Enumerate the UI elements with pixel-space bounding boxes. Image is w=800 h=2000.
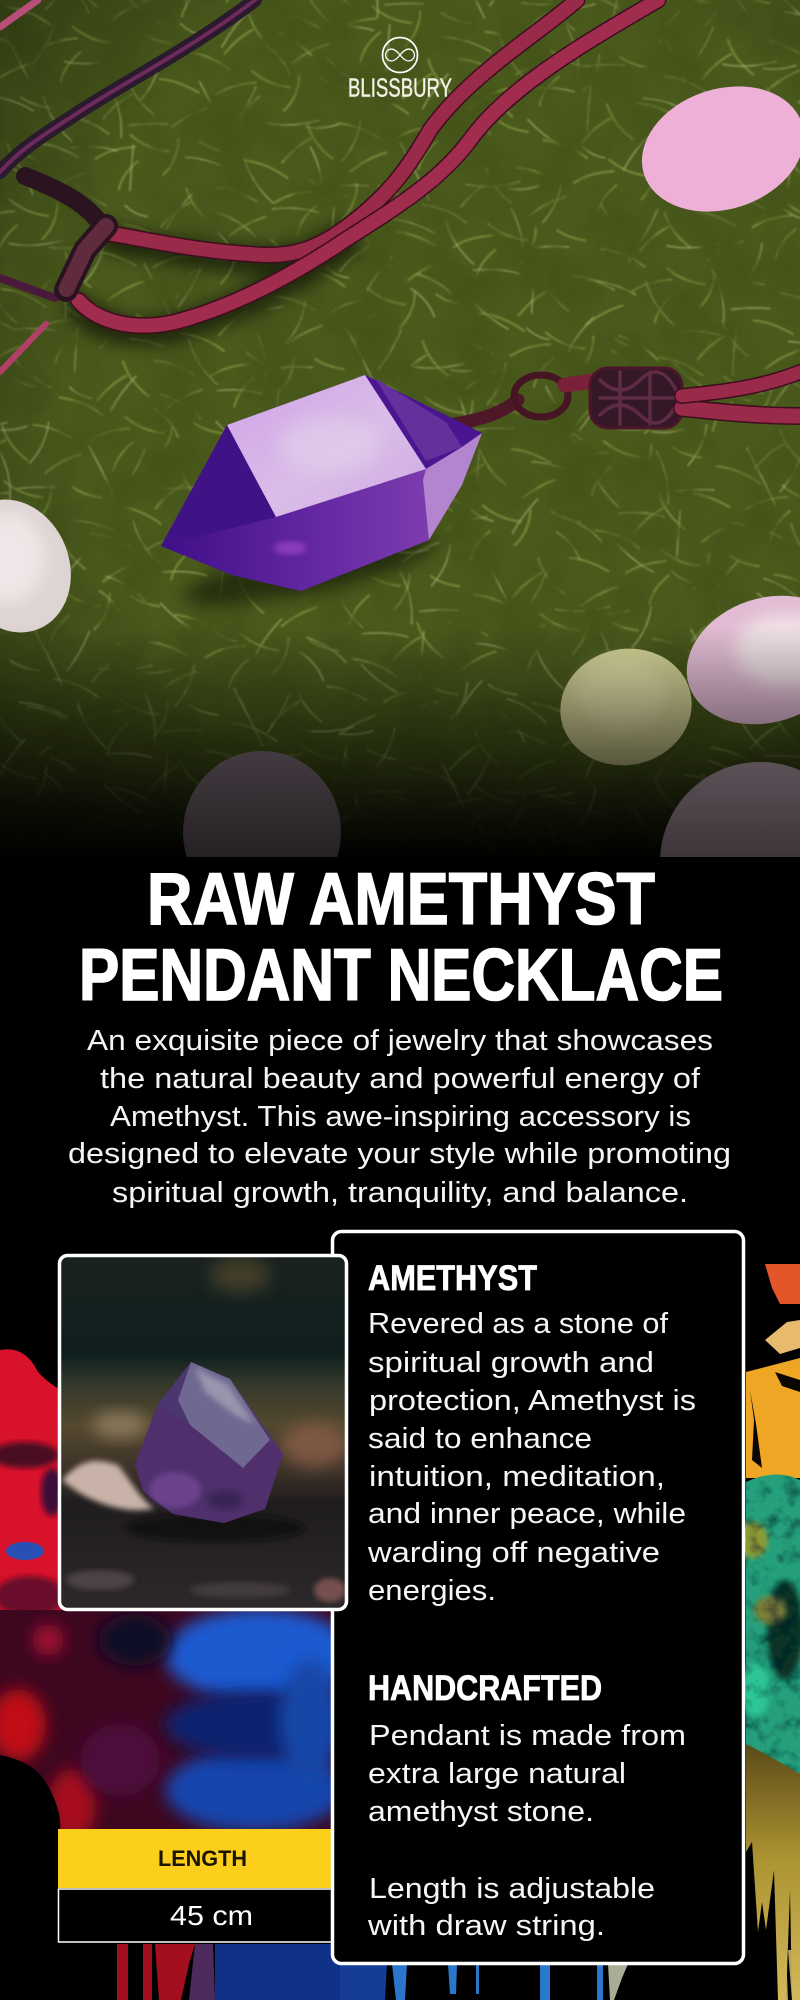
dark stone bottom	[183, 751, 341, 857]
white egg left	[0, 500, 71, 632]
paint splash: right orange, green and yellow	[736, 1264, 800, 2000]
intro paragraph	[68, 1025, 731, 1209]
length value	[58, 1889, 334, 1942]
necklace clasp and knot	[449, 368, 800, 428]
handcrafted description: extra large natural	[368, 1758, 626, 1790]
red powder beside photo	[0, 1349, 66, 1620]
pink-white egg right	[686, 596, 800, 724]
yellow drips	[746, 1744, 800, 2000]
amethyst pendant	[161, 375, 482, 619]
amethyst description: Revered as a stone of	[368, 1308, 668, 1340]
length header	[58, 1829, 333, 1888]
bottom fade	[0, 634, 800, 857]
brand logo	[348, 38, 452, 102]
panel: text card	[332, 1232, 744, 1964]
handcrafted description	[367, 1720, 686, 1942]
hero photo: amethyst pendant on grass	[0, 0, 800, 857]
amethyst description: energies.	[368, 1575, 496, 1607]
paint splash: bottom drips	[117, 1944, 797, 2000]
teal powder	[736, 1474, 800, 1774]
grey stone bottom right	[660, 762, 800, 857]
heading: handcrafted: HANDCRAFTED	[368, 1669, 602, 1708]
pink egg top right	[642, 86, 800, 212]
title: RAW AMETHYST	[147, 859, 655, 940]
grass background	[0, 0, 800, 857]
length value: 45 cm	[170, 1900, 253, 1931]
handcrafted description: amethyst stone.	[368, 1796, 594, 1828]
necklace cords	[0, 0, 658, 372]
intro paragraph: Amethyst. This awe-inspiring accessory is	[110, 1101, 691, 1133]
intro paragraph: designed to elevate your style while promoting	[68, 1138, 731, 1170]
orange powder	[746, 1264, 800, 1478]
lower powder field	[0, 1610, 331, 1829]
length header: LENGTH	[158, 1846, 247, 1871]
amethyst description: warding off negative	[367, 1537, 660, 1569]
handcrafted description: Length is adjustable	[369, 1873, 655, 1905]
brand name: BLISSBURY	[348, 72, 452, 102]
photo card: raw amethyst stone	[60, 1256, 349, 1610]
length table	[58, 1829, 334, 1942]
handcrafted description: Pendant is made from	[369, 1720, 686, 1752]
intro paragraph: An exquisite piece of jewelry that showcases	[87, 1025, 713, 1057]
intro paragraph: spiritual growth, tranquility, and balance.	[112, 1177, 688, 1209]
paint splash: left red and blue	[0, 1349, 355, 1841]
icon: infinity in circle	[382, 38, 418, 72]
handcrafted description: with draw string.	[367, 1910, 605, 1942]
amethyst description: spiritual growth and	[368, 1347, 654, 1379]
amethyst description: and inner peace, while	[368, 1498, 686, 1530]
amethyst description: said to enhance	[368, 1423, 592, 1455]
amethyst description: protection, Amethyst is	[369, 1385, 696, 1417]
title	[79, 859, 723, 1016]
intro paragraph: the natural beauty and powerful energy of	[100, 1063, 700, 1095]
amethyst description: intuition, meditation,	[369, 1461, 665, 1493]
pale yellow egg	[560, 648, 692, 766]
amethyst description	[367, 1308, 696, 1607]
heading: amethyst: AMETHYST	[368, 1259, 537, 1298]
